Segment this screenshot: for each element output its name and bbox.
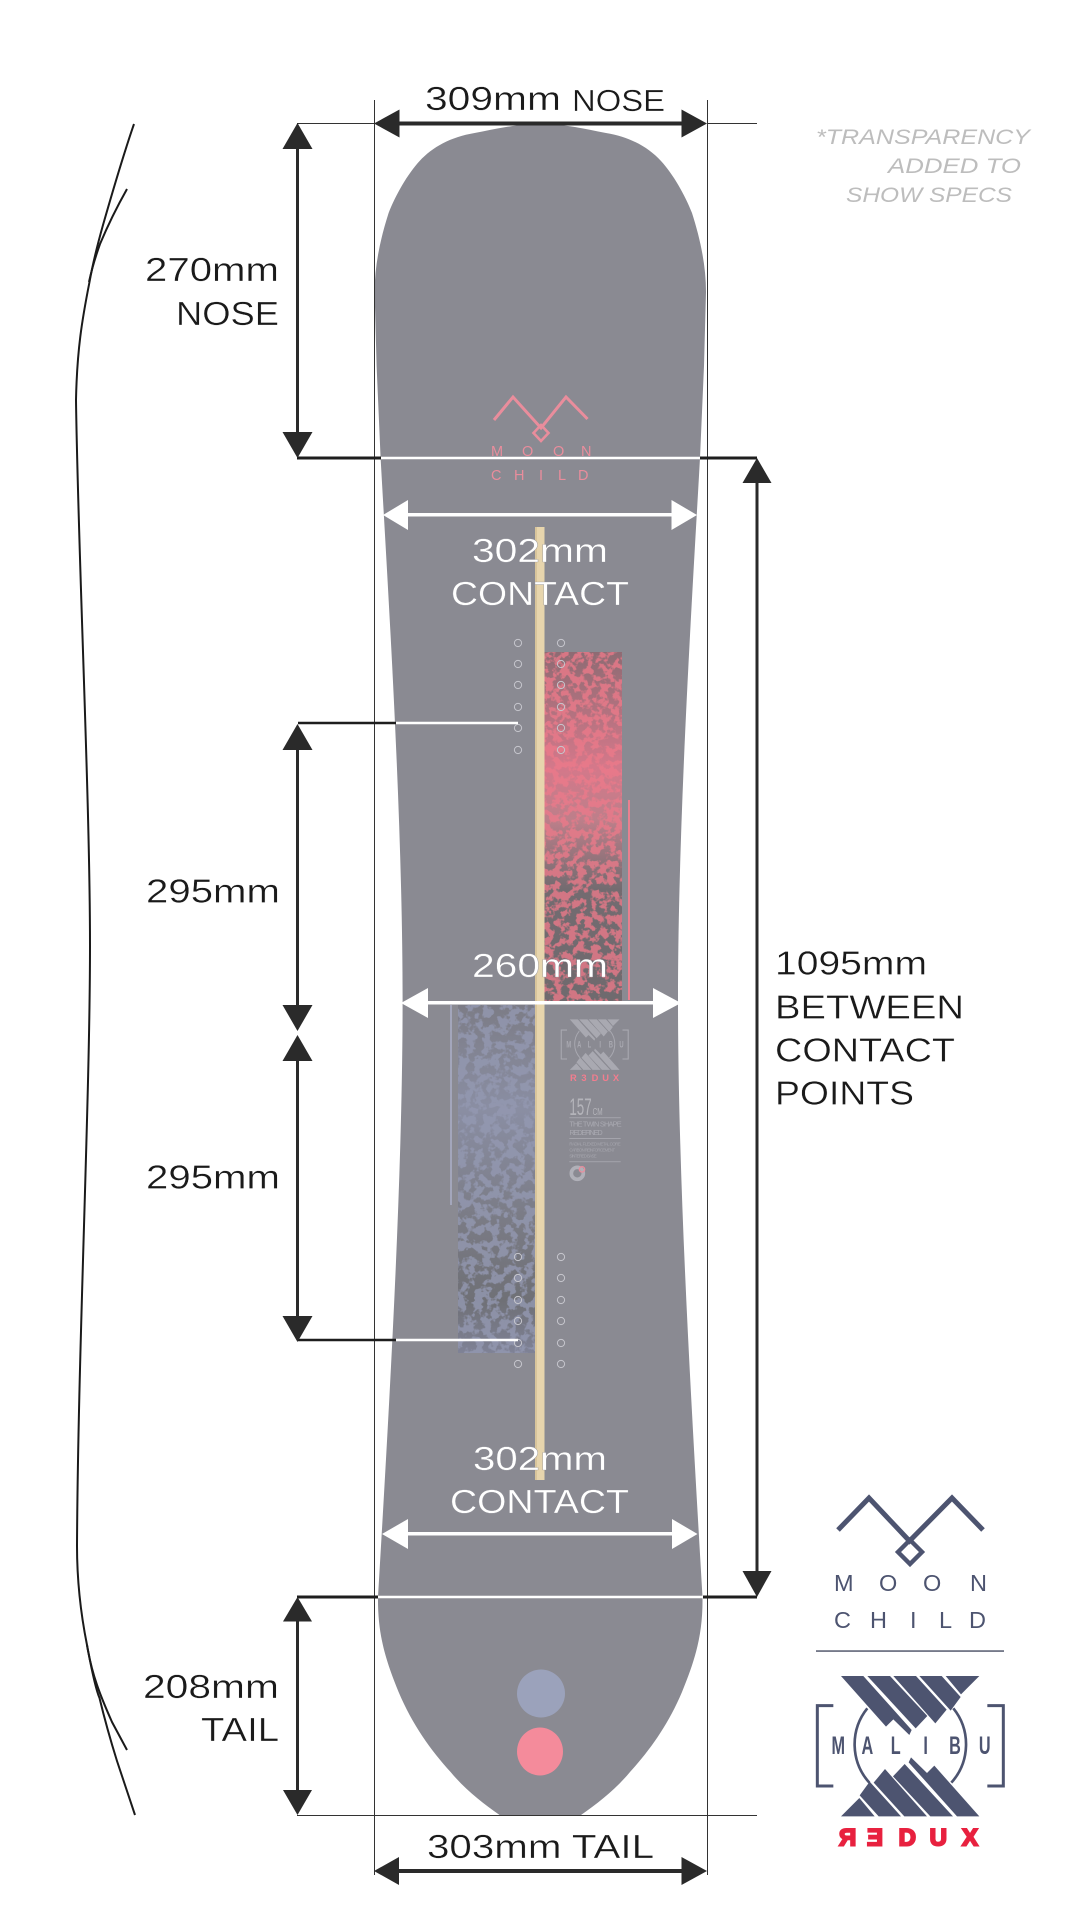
arrow: tail length bbox=[283, 1597, 312, 1815]
small malibu redux topsheet logo and text bbox=[561, 1019, 628, 1179]
pink moon child logo on board bbox=[491, 397, 591, 484]
white arrow: upper contact width bbox=[383, 500, 697, 530]
small malibu redux topsheet logo and text: CARBON REINFORCEMENT bbox=[569, 1148, 615, 1153]
label: tail length bbox=[143, 1668, 279, 1748]
label: nose width bbox=[425, 80, 665, 118]
pink moon child logo on board: MOON bbox=[491, 444, 591, 460]
arrow: lower stance bbox=[282, 1035, 312, 1342]
blue graphic panel bbox=[450, 1005, 535, 1353]
small malibu redux topsheet logo and text: CM bbox=[593, 1107, 603, 1118]
note: transparency: *TRANSPARENCY bbox=[816, 126, 1032, 149]
contact lines across board bbox=[297, 458, 757, 1597]
label: between contact points: BETWEEN bbox=[775, 988, 964, 1026]
arrow: upper stance bbox=[282, 724, 312, 1031]
label: nose length: 270mm bbox=[145, 251, 279, 288]
label: upper contact bbox=[451, 532, 629, 612]
label: lower contact: CONTACT bbox=[450, 1483, 629, 1520]
logo divider bbox=[816, 1650, 1004, 1652]
binding insert holes bbox=[514, 639, 565, 1368]
note: transparency: SHOW SPECS bbox=[846, 184, 1012, 207]
small malibu redux topsheet logo and text: R3DUX bbox=[570, 1073, 620, 1083]
label: between contact points: 1095mm bbox=[775, 944, 927, 982]
side profile camber lines bbox=[76, 124, 135, 1815]
label: between contact points: CONTACT bbox=[775, 1032, 955, 1068]
arrow: nose length bbox=[282, 123, 312, 458]
small malibu redux topsheet logo and text: MALIBU bbox=[566, 1039, 624, 1050]
label: between contact points: POINTS bbox=[775, 1074, 914, 1112]
note: transparency: ADDED TO bbox=[886, 155, 1021, 178]
label: tail length: TAIL bbox=[201, 1711, 279, 1748]
label: tail length: 208mm bbox=[143, 1668, 279, 1705]
label: between contact points bbox=[775, 944, 964, 1112]
dimension guide lines bbox=[297, 100, 757, 1875]
tail blobs bbox=[517, 1670, 565, 1776]
label: tail width: 303mm TAIL bbox=[427, 1828, 654, 1865]
moon child logo bbox=[834, 1498, 987, 1633]
wooden stringer bbox=[535, 527, 544, 1480]
label: waist: 260mm bbox=[472, 947, 608, 984]
small malibu redux topsheet logo and text: REDEFINED bbox=[569, 1128, 603, 1137]
small malibu redux topsheet logo and text: RADIAL FLEXED METAL CORE bbox=[569, 1141, 621, 1146]
label: nose length bbox=[145, 251, 279, 332]
malibu redux logo bbox=[817, 1676, 1003, 1852]
malibu redux logo: MALIBU bbox=[832, 1733, 991, 1760]
label: upper contact: 302mm bbox=[472, 532, 608, 569]
small malibu redux topsheet logo and text: 157 bbox=[569, 1094, 592, 1121]
label: lower contact bbox=[450, 1440, 629, 1520]
label: nose width: 309mm bbox=[425, 80, 561, 117]
label: upper stance: 295mm bbox=[146, 872, 280, 910]
label: lower contact: 302mm bbox=[473, 1440, 607, 1477]
malibu redux logo: ЯƎDUX bbox=[839, 1825, 978, 1852]
arrow: nose width bbox=[374, 110, 707, 138]
small malibu redux topsheet logo and text: THE TWIN SHAPE bbox=[569, 1120, 622, 1129]
moon child logo: MOON bbox=[834, 1570, 987, 1596]
label: upper contact: CONTACT bbox=[451, 575, 629, 612]
note: transparency bbox=[816, 126, 1032, 207]
arrow: between contact points bbox=[742, 458, 772, 1597]
white arrow: waist width bbox=[401, 988, 681, 1018]
label: nose width: NOSE bbox=[572, 83, 665, 118]
moon child logo: CHILD bbox=[834, 1607, 986, 1633]
label: nose length: NOSE bbox=[176, 295, 279, 332]
white arrow: lower contact width bbox=[382, 1519, 698, 1549]
small malibu redux topsheet logo and text: SINTERED BASE bbox=[569, 1153, 597, 1158]
pink moon child logo on board: CHILD bbox=[491, 468, 588, 484]
arrow: tail width bbox=[374, 1857, 707, 1885]
board silhouette bbox=[375, 124, 706, 1815]
label: lower stance: 295mm bbox=[146, 1158, 280, 1196]
red graphic panel bbox=[544, 652, 630, 1001]
